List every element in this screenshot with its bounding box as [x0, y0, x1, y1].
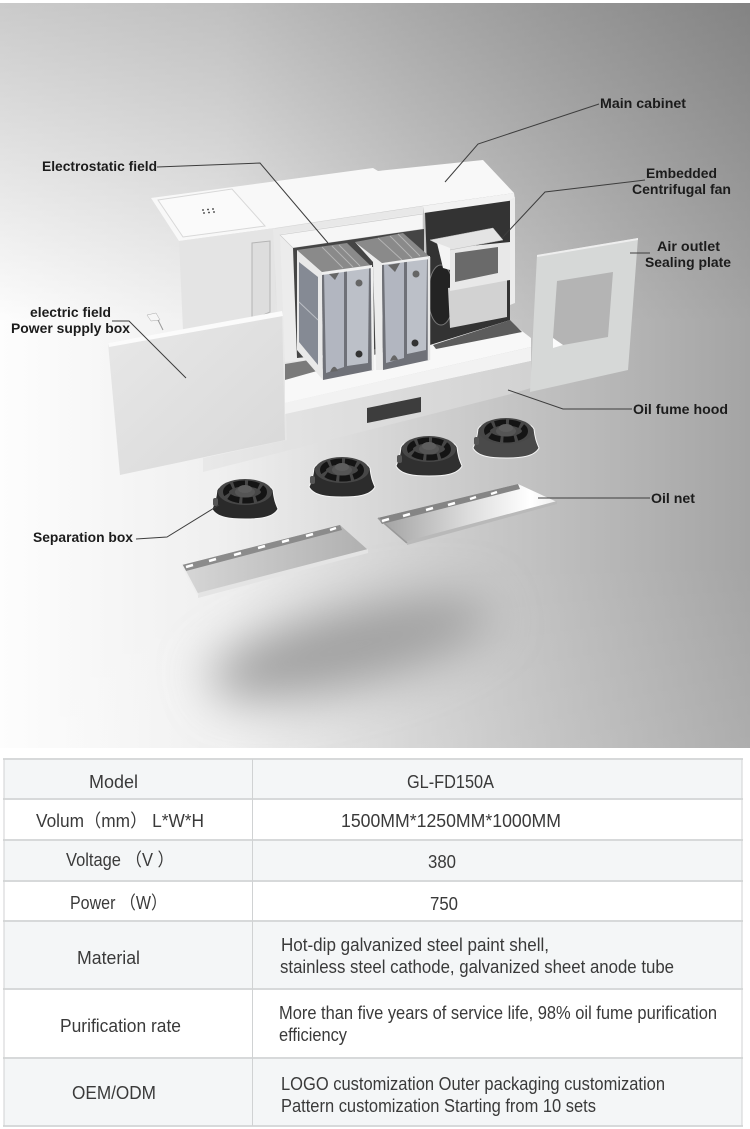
- vent dots: [202, 208, 215, 214]
- label: oil net: Oil net: [651, 490, 695, 506]
- oil net tray right: [378, 484, 557, 545]
- main cabinet: [151, 160, 514, 362]
- label: electric field power supply box: Power supply box: [11, 320, 130, 336]
- hood front: [203, 361, 531, 472]
- label: embedded centrifugal fan: Embedded: [646, 165, 717, 181]
- display window: [367, 397, 421, 423]
- row: oem odm: [72, 1074, 665, 1116]
- separation box fans: [212, 418, 539, 519]
- row: model: Model: [89, 772, 138, 792]
- small white connector: [147, 313, 163, 330]
- fan outlet: [450, 242, 510, 291]
- label: air outlet sealing plate: Air outlet: [657, 238, 720, 254]
- row: power: [70, 893, 458, 914]
- fan top band: [430, 228, 503, 250]
- specification table: [3, 759, 743, 1126]
- row: oem odm: Pattern customization Starting from 10 sets: [281, 1096, 596, 1116]
- row: oem odm: OEM/ODM: [72, 1083, 156, 1103]
- label: electric field power supply box: [11, 304, 130, 336]
- electrostatic module 2: [355, 233, 430, 370]
- label: embedded centrifugal fan: [632, 165, 731, 197]
- row: purification rate: efficiency: [279, 1025, 347, 1045]
- row: material: Hot-dip galvanized steel paint shell,: [281, 935, 549, 955]
- row: material: [77, 935, 674, 977]
- row: oem odm: LOGO customization Outer packaging customization: [281, 1074, 665, 1094]
- row backgrounds: [4, 759, 742, 1126]
- oil net tray left: [182, 525, 368, 598]
- floor shadow: [191, 575, 496, 725]
- electrostatic module 1: [297, 243, 373, 380]
- fan 3: [396, 436, 462, 476]
- fan bay: [423, 193, 522, 349]
- row: purification rate: Purification rate: [60, 1016, 181, 1036]
- centre cabinet wall: [273, 206, 423, 362]
- cabinet top: [151, 160, 514, 241]
- label: main cabinet: Main cabinet: [600, 95, 686, 111]
- fan bay top bar: [423, 193, 515, 213]
- label: electric field power supply box: electric field: [30, 304, 111, 320]
- hood lip: [285, 347, 531, 414]
- row: voltage: [66, 850, 456, 872]
- left cabinet front: [179, 228, 275, 330]
- fan scroll lower: [448, 280, 507, 328]
- gradient backdrop: [0, 3, 750, 748]
- row: voltage: 380: [428, 852, 456, 872]
- label: embedded centrifugal fan: Centrifugal fan: [632, 181, 731, 197]
- row: purification rate: More than five years of service life, 98% oil fume purification: [279, 1003, 717, 1023]
- row: voltage: Voltage （V ）: [66, 850, 174, 870]
- air outlet sealing plate: [530, 238, 638, 392]
- label: air outlet sealing plate: Sealing plate: [645, 254, 731, 270]
- fan 1: [212, 479, 278, 519]
- label: separation box: Separation box: [33, 529, 133, 545]
- row: model: [89, 772, 494, 792]
- hood top face: [285, 318, 531, 403]
- callout labels: [11, 95, 731, 545]
- right post: [510, 197, 515, 305]
- row: purification rate: [60, 1003, 717, 1045]
- label: air outlet sealing plate: [645, 238, 731, 270]
- side slot: [252, 241, 270, 320]
- electrostatic field frame: [280, 213, 430, 380]
- row: volume: [36, 811, 561, 831]
- hood: [203, 318, 531, 472]
- fan 4: [473, 418, 539, 458]
- leader lines: [112, 104, 650, 539]
- label: electrostatic field: Electrostatic field: [42, 158, 157, 174]
- label: oil fume hood: Oil fume hood: [633, 401, 728, 417]
- fan 2: [309, 457, 375, 497]
- row: volume: Volum（mm） L*W*H: [36, 811, 204, 831]
- row: material: Material: [77, 948, 140, 968]
- top access panel: [158, 189, 265, 237]
- fan motor wheel: [428, 265, 454, 325]
- row: material: stainless steel cathode, galvanized sheet anode tube: [280, 957, 674, 977]
- row: power: 750: [430, 894, 458, 914]
- row: power: Power （W）: [70, 893, 167, 913]
- row: volume: 1500MM*1250MM*1000MM: [341, 811, 561, 831]
- row: model: GL-FD150A: [407, 772, 494, 792]
- power supply box door: [108, 311, 285, 475]
- mid shelf strip: [433, 320, 522, 349]
- fan side box: [437, 243, 450, 270]
